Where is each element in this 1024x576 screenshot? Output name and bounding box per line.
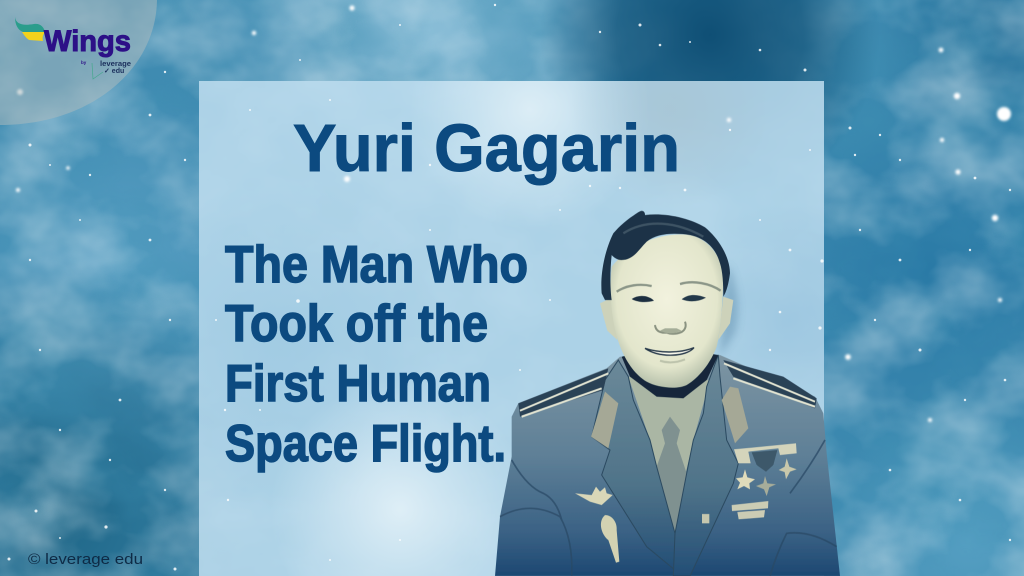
- collar tabs: [591, 392, 618, 448]
- logo byline: leverage: [100, 61, 131, 68]
- right lapel: [673, 355, 738, 576]
- subtitle text block: First Human: [225, 355, 491, 413]
- subtitle text block: [225, 236, 528, 473]
- lower lip shade: [660, 359, 685, 362]
- mouth: [645, 348, 694, 355]
- logo wordmark: Wings: [44, 25, 131, 58]
- sleeve folds: [500, 440, 837, 576]
- logo backdrop circle: [0, 0, 157, 125]
- hair highlight: [623, 224, 703, 237]
- left shoulder board: [518, 368, 608, 417]
- logo byline: ✓ edu: [104, 68, 124, 75]
- nose: [655, 322, 686, 334]
- face: [611, 234, 723, 388]
- right shoulder board: [723, 360, 817, 408]
- copyright credit: © leverage edu: [28, 551, 143, 568]
- eyes: [632, 296, 654, 302]
- icon: logo ribbon: [15, 17, 45, 41]
- subtitle text block: Took off the: [225, 295, 488, 353]
- logo byline: [81, 60, 131, 79]
- portrait: Yuri Gagarin in uniform: [495, 211, 840, 576]
- logo byline: by: [81, 60, 87, 65]
- subtitle text block: Space Flight.: [225, 415, 506, 473]
- subtitle text block: The Man Who: [225, 236, 528, 294]
- shirt: [628, 377, 710, 477]
- eyebrows: [617, 282, 721, 292]
- jacket: [495, 355, 840, 576]
- badges: [575, 487, 619, 563]
- title: Yuri Gagarin: [293, 111, 680, 186]
- ears: [600, 300, 617, 340]
- nose shadow: [660, 328, 682, 333]
- tie: [657, 417, 687, 533]
- neck shadow: [622, 347, 718, 398]
- hair: [601, 211, 730, 300]
- logo: Wings by leverage edu: [15, 17, 131, 79]
- portrait shadow: [720, 263, 738, 357]
- medals: [702, 443, 797, 523]
- left lapel: [592, 360, 675, 570]
- panel: translucent light title panel: [199, 81, 824, 576]
